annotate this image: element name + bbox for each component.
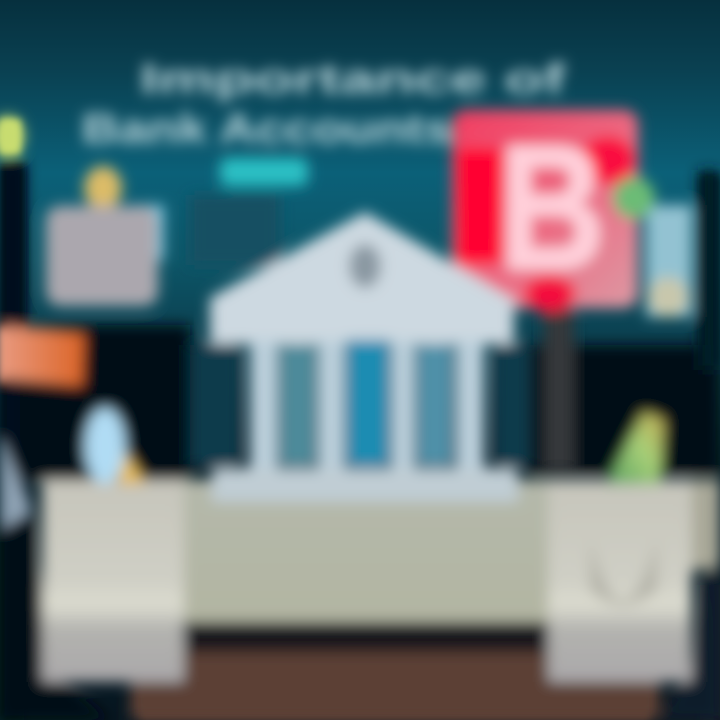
red left stripe — [456, 148, 502, 264]
red upper-right patch — [580, 136, 636, 184]
pediment emblem — [349, 244, 381, 288]
red lower patch — [524, 276, 576, 312]
panel: red bitcoin sign — [452, 110, 638, 312]
counter — [180, 468, 720, 622]
icon: letter B: B — [499, 110, 605, 306]
dark figure left — [0, 436, 110, 720]
icon: yellow-green corner mark — [0, 116, 24, 156]
subtitle accent — [220, 158, 308, 186]
dark figure right — [660, 560, 720, 720]
title: Importance of — [140, 55, 567, 102]
title: Bank Accounts — [82, 105, 452, 152]
icon: blue figure on left pedestal — [85, 408, 146, 484]
roof pediment — [210, 212, 514, 344]
icon: orange banner — [0, 326, 84, 386]
panel: right teal and green block — [613, 177, 692, 317]
bank building — [210, 212, 514, 475]
panel: left grey bag — [46, 166, 164, 306]
icon: green figure on right pedestal — [606, 412, 664, 484]
floor wood — [130, 620, 660, 720]
dark background silhouettes — [0, 162, 720, 482]
panel: right pedestal — [548, 480, 692, 682]
panel: left pedestal — [42, 480, 184, 682]
window openings — [280, 340, 453, 466]
title — [82, 55, 567, 152]
columns — [250, 340, 484, 475]
